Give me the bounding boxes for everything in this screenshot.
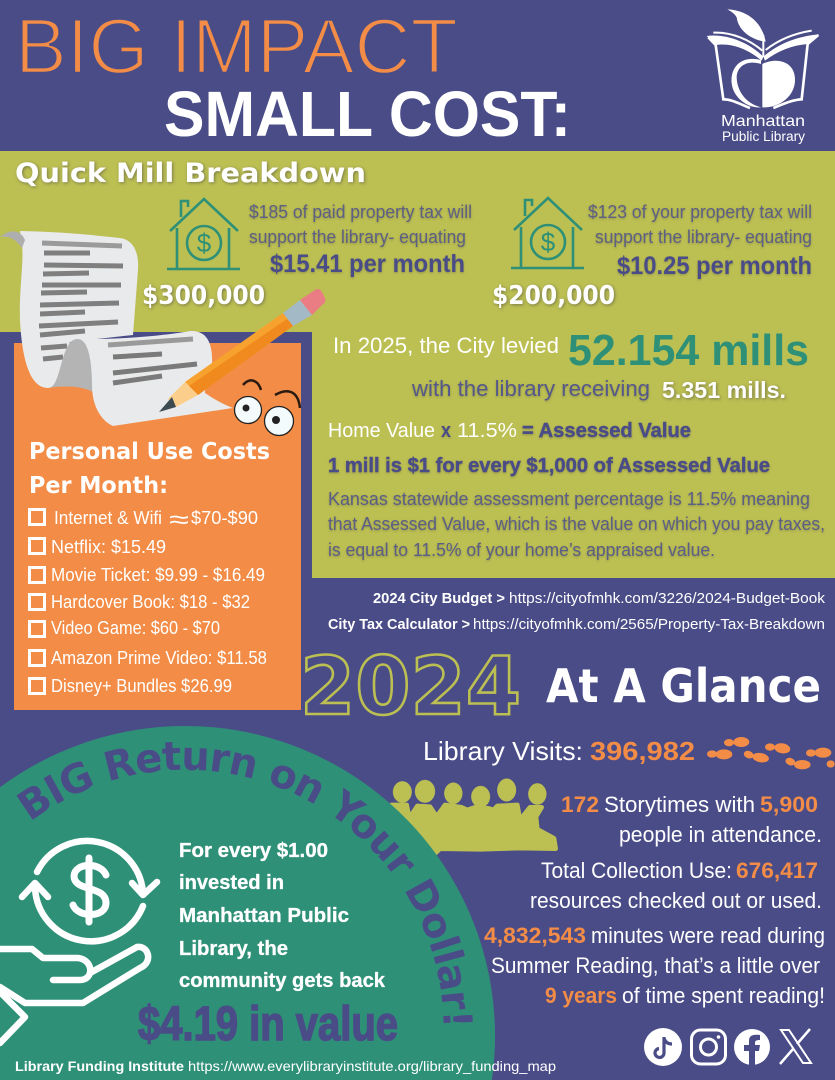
title line: big impact: BIG IMPACT [15, 2, 458, 90]
budget label: 2024 City Budget > [373, 591, 505, 607]
mill definition: 1 mill is $1 for every $1,000 of Assessed Value [328, 455, 770, 477]
attendance value: 5,900 [760, 792, 818, 817]
eyebrows [243, 380, 300, 408]
levy value: 52.154 mills [568, 326, 809, 375]
scroll sheet upper [20, 231, 138, 388]
stats: storytimes [561, 792, 822, 847]
logo text: Manhattan: Manhattan [721, 113, 805, 130]
line two: support the library- equating [249, 227, 466, 247]
heading: 2024 outline: 2024 [300, 640, 521, 733]
source label: Library Funding Institute [15, 1058, 184, 1074]
approximately sign: ≈ [169, 506, 189, 534]
text: assessed value formula [328, 420, 770, 477]
item: hardcover book: Hardcover Book: $18 - $32 [51, 592, 250, 612]
dollar sign [73, 858, 106, 922]
olive mill breakdown panel [0, 151, 835, 578]
storytimes label: Storytimes with [604, 792, 755, 817]
visits value: 396,982 [590, 736, 695, 766]
pencil lead [159, 397, 176, 412]
icon: hand holding dollar cycle [0, 841, 157, 1043]
line four: Library, the [179, 938, 288, 960]
item: movie ticket: Movie Ticket: $9.99 - $16.49 [51, 565, 265, 585]
calculator label: City Tax Calculator > [328, 617, 470, 633]
checklist [30, 506, 267, 696]
property tax text: 200k home [588, 202, 812, 280]
attendance label: people in attendance. [619, 822, 822, 847]
pencil eraser [300, 289, 325, 315]
icon: footprints [707, 737, 835, 769]
panel: big return circle [0, 726, 495, 1080]
scroll sheet lower [77, 331, 233, 426]
visits label: Library Visits: [423, 736, 583, 766]
pencil body stripe [189, 319, 293, 395]
left eye [234, 396, 262, 424]
cartoon eyes [234, 380, 300, 436]
scroll fold [48, 339, 93, 392]
line five: community gets back [179, 970, 386, 992]
collection note: resources checked out or used. [530, 888, 822, 913]
logo: Manhattan Public Library [707, 9, 819, 144]
percent: 11.5% [457, 420, 517, 442]
collection label: Total Collection Use: [541, 858, 732, 883]
pencil ferrule [283, 300, 312, 326]
curved heading guide [30, 770, 444, 1047]
curved heading: BIG Return on Your Dollar! [16, 742, 473, 1023]
orange panel background [14, 343, 301, 710]
icon: facebook [734, 1029, 770, 1065]
years label: of time spent reading! [622, 983, 825, 1008]
line two: support the library- equating [595, 227, 812, 247]
scroll lower lines [108, 339, 197, 383]
return text [179, 840, 386, 992]
home value: 300k: $300,000 [142, 281, 265, 311]
illustration: storytime silhouettes [380, 779, 556, 858]
source url: https://www.everylibraryinstitute.org/library_funding_map [188, 1058, 556, 1074]
equals assessed value: = Assessed Value [522, 420, 691, 442]
line one: $185 of paid property tax will [249, 202, 472, 222]
library share value: 5.351 mills. [662, 377, 786, 403]
panel heading: Personal Use Costs [29, 437, 270, 465]
stat: library visits [423, 736, 695, 766]
years value: 9 years [545, 983, 617, 1008]
pencil body [185, 313, 293, 395]
right pupil [272, 416, 280, 424]
green circle [0, 726, 495, 1080]
storytimes count: 172 [561, 792, 599, 817]
scroll curl [0, 231, 25, 248]
item: video game: Video Game: $60 - $70 [51, 618, 220, 638]
hand [0, 947, 148, 1043]
pencil [159, 289, 325, 412]
line two: that Assessed Value, which is the value on which you pay taxes, [328, 514, 825, 534]
stats: summer reading [484, 923, 825, 1008]
line one: For every $1.00 [179, 840, 328, 862]
item: netflix: Netflix: $15.49 [51, 537, 166, 557]
text: levied mills [333, 326, 809, 403]
minutes value: 4,832,543 [484, 923, 586, 948]
panel heading second line: Per Month: [29, 471, 168, 499]
collection value: 676,417 [736, 858, 818, 883]
icon: house with dollar, 300k: $ [197, 228, 212, 258]
social icons [644, 1028, 811, 1066]
illustration: receipt scroll and pencil [0, 231, 325, 436]
icon: tiktok [644, 1028, 682, 1066]
budget url: https://cityofmhk.com/3226/2024-Budget-Book [509, 591, 826, 607]
logo mark: book and apple [707, 9, 819, 108]
return value: $4.19 in value [138, 998, 398, 1051]
item: amazon: Amazon Prime Video: $11.58 [51, 648, 267, 668]
icon: instagram [692, 1030, 726, 1064]
icon: house with dollar, 200k [511, 198, 584, 268]
line one: $123 of your property tax will [588, 202, 812, 222]
text: kansas assessment note [328, 489, 825, 560]
left pupil [242, 404, 250, 412]
scroll upper lines [39, 243, 123, 359]
checkboxes [30, 510, 44, 694]
calculator url: https://cityofmhk.com/2565/Property-Tax-Breakdown [473, 617, 825, 633]
icon: x [780, 1029, 811, 1064]
item: internet: Internet & Wifi [54, 508, 162, 528]
line three: is equal to 11.5% of your home’s appraised value. [328, 540, 715, 560]
line three: Manhattan Public [179, 905, 349, 927]
monthly amount: $10.25 per month [617, 252, 812, 280]
property tax text: 300k home [249, 202, 472, 278]
pencil wood tip [168, 382, 198, 407]
right eye [264, 406, 294, 436]
internet price: $70-$90 [191, 508, 258, 528]
title line: small cost: SMALL COST: [164, 78, 571, 150]
item: disney: Disney+ Bundles $26.99 [51, 676, 232, 696]
home value: Home Value [328, 420, 435, 442]
line one: Kansas statewide assessment percentage is 11.5% meaning [328, 489, 810, 509]
heading: quick mill breakdown: Quick Mill Breakdown [15, 158, 366, 189]
icon: house with dollar, 300k [167, 199, 240, 269]
icon: house with dollar, 200k: $ [541, 227, 556, 257]
levy intro: In 2025, the City levied [333, 333, 559, 358]
times: x [441, 420, 451, 442]
library share text: with the library receiving [411, 376, 650, 401]
line two: invested in [179, 872, 284, 894]
summer reading line: Summer Reading, that’s a little over [491, 953, 820, 978]
minutes label: minutes were read during [591, 923, 825, 948]
home value: 200k: $200,000 [492, 281, 615, 311]
panel: personal use costs [14, 343, 301, 710]
stats: collection use [530, 858, 822, 913]
links: city budget and tax calculator [328, 591, 826, 633]
source: library funding institute [15, 1058, 556, 1074]
logo text: Public Library: Public Library [722, 129, 805, 144]
cycle arrows [22, 841, 157, 941]
monthly amount: $15.41 per month [270, 250, 465, 278]
title [15, 2, 571, 150]
